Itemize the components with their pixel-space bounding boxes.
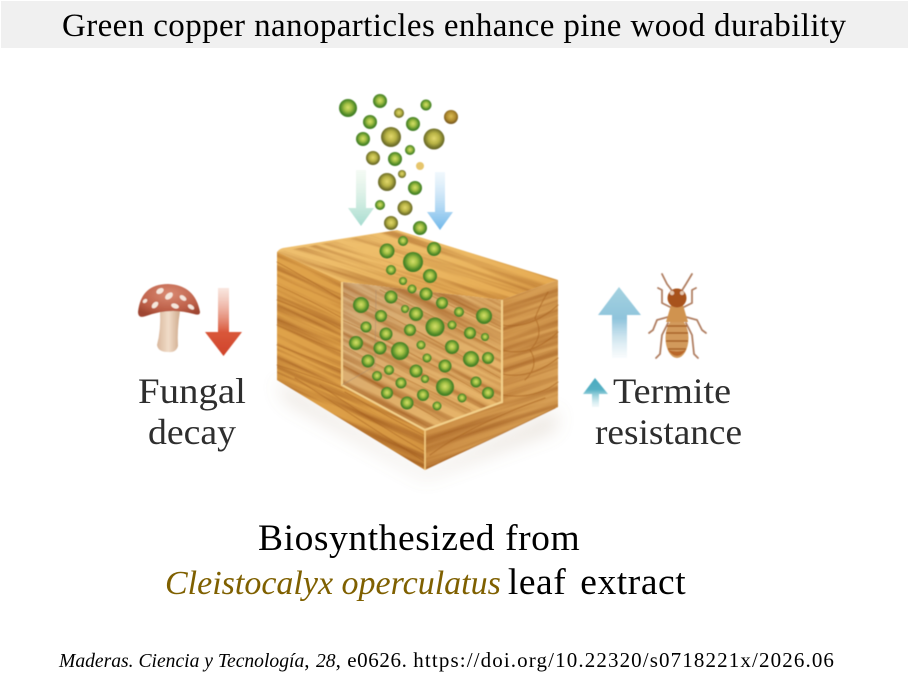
label: fungal decay: decay [148,412,236,452]
illustration: copper nanoparticles entering a pine wood block [137,93,741,476]
termite legs and antennae [649,274,706,358]
mushroom cap [138,284,200,317]
arrow: small teal up [583,378,608,407]
label: fungal decay [138,371,246,452]
arrow: red down [205,288,242,356]
arrow: blue down [427,172,453,230]
caption: plant source: Cleistocalyx operculatusleaf extract [165,562,686,603]
label: termite resistance: resistance [595,412,742,452]
arrow: large light-blue up [598,287,641,358]
termite abdomen [666,318,688,358]
cut-out interior [342,282,502,430]
block right faces [425,280,558,470]
block shadow [277,380,558,478]
cut-out rim highlights [342,282,502,430]
icon: mushroom [138,284,200,352]
title: Green copper nanoparticles enhance pine wood durability [62,8,846,44]
block top face [277,230,558,300]
caption: biosynthesized from: Biosynthesized from [258,518,580,559]
termite thorax [666,305,688,322]
termite head [668,288,686,308]
mushroom stem [157,311,180,352]
arrow: green down [348,170,374,226]
citation: Maderas. Ciencia y Tecnología, 28, e0626. https://doi.org/10.22320/s0718221x/2026.06 [59,648,835,672]
block left face [277,252,425,470]
wood block [276,229,560,476]
label: termite resistance: Termite [613,371,731,411]
wood grain [277,262,558,462]
label: fungal decay: Fungal [138,371,246,411]
title [1,1,908,48]
icon: termite [649,274,706,358]
nanoparticles [339,94,494,410]
label: termite resistance [595,371,742,452]
